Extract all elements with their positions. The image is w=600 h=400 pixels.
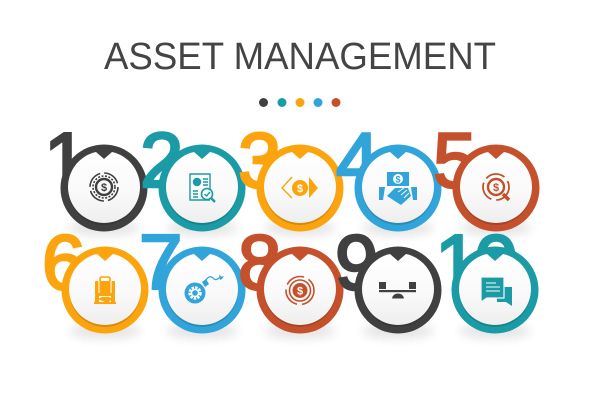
item 3: 3 bbox=[238, 116, 281, 204]
icon: balance seesaw bbox=[379, 282, 416, 298]
item 2 bbox=[140, 116, 246, 236]
item 1: 1 bbox=[44, 116, 87, 204]
pagination dots bbox=[259, 98, 340, 107]
icon: banknote and handshake: $ bbox=[395, 174, 401, 184]
icon: document with magnifier bbox=[190, 174, 215, 202]
item 10 bbox=[441, 234, 538, 341]
item 9 bbox=[335, 218, 442, 339]
icon: dollar with arrows: $ bbox=[297, 183, 303, 195]
item 4: 4 bbox=[336, 116, 379, 204]
icon: dollar search with arrows: $ bbox=[493, 182, 499, 194]
item 7: 7 bbox=[139, 218, 182, 306]
icon: briefcase with handshake bbox=[94, 277, 116, 304]
item 3 bbox=[238, 116, 344, 236]
icon: speech bubbles bbox=[481, 277, 512, 306]
item 8: 8 bbox=[238, 218, 281, 306]
item 2: 2 bbox=[140, 116, 183, 204]
item 7 bbox=[139, 218, 246, 339]
item 10: 10 bbox=[435, 218, 518, 306]
icon: rotating dollar gear: $ bbox=[101, 182, 107, 194]
item 4 bbox=[336, 116, 442, 236]
item 6 bbox=[42, 218, 148, 339]
item 6: 6 bbox=[42, 218, 85, 306]
icon: dollar with circular arrows: $ bbox=[297, 286, 303, 298]
item 1 bbox=[50, 132, 148, 238]
item 8 bbox=[238, 218, 344, 339]
icon: bomb with gear bbox=[184, 274, 224, 304]
item 5 bbox=[433, 116, 540, 236]
item 9: 9 bbox=[335, 218, 378, 306]
title: ASSET MANAGEMENT bbox=[104, 36, 496, 78]
item 5: 5 bbox=[433, 116, 476, 204]
